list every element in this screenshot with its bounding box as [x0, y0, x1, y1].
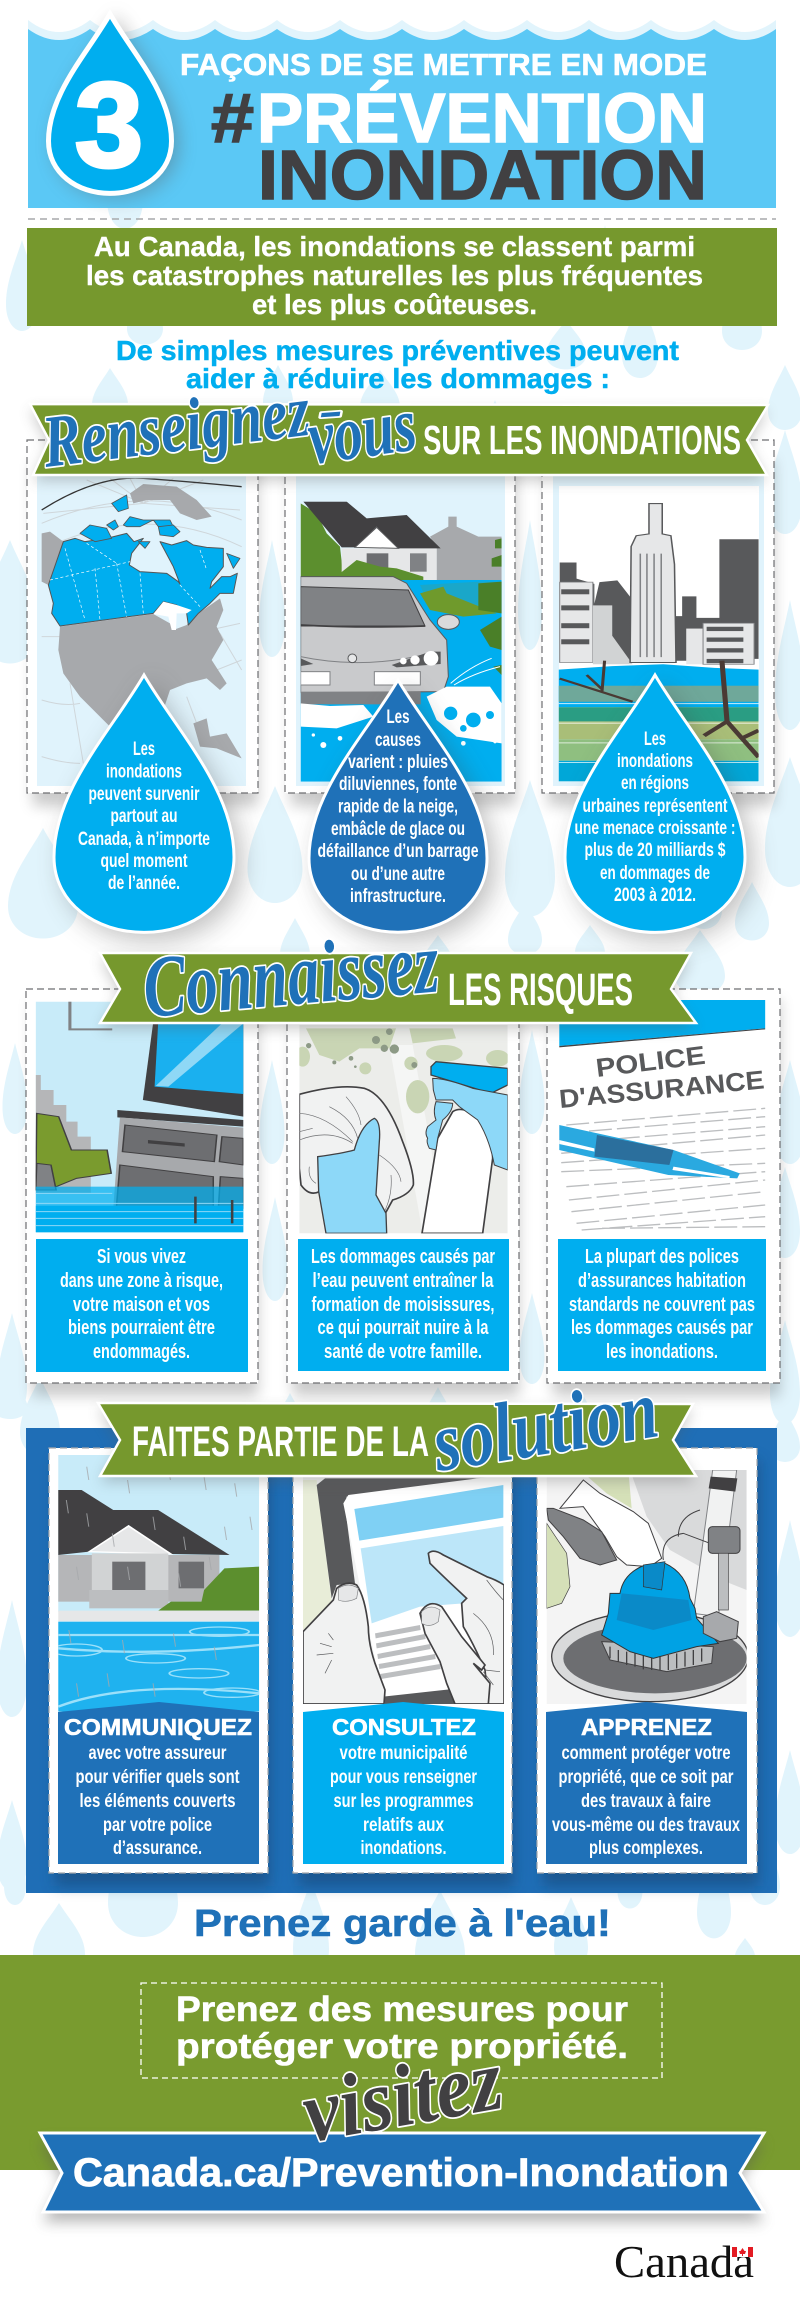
caption: moisissures: formation de moisissures,: [312, 1294, 494, 1316]
banner: connaissez les risques: Connaissez: [139, 914, 443, 1037]
caption: apprenez: plus complexes.: [589, 1838, 703, 1859]
caption: consultez: relatifs aux: [363, 1815, 444, 1836]
intro panel: [27, 228, 777, 326]
intro panel: Au Canada, les inondations se classent parmi: [94, 231, 695, 262]
drop with number 3: [48, 14, 180, 198]
dashed call-to-action box: Prenez des mesures pour: [176, 1990, 628, 2029]
header subtitle: FAÇONS DE SE METTRE EN MODE: [180, 47, 707, 82]
caption: apprenez: [546, 1702, 747, 1864]
banner: renseignez-vous: Renseignez: [37, 370, 314, 484]
caption: polices d'assurance: La plupart des polices: [585, 1246, 739, 1268]
banner: renseignez-vous: [30, 370, 768, 484]
drop: urban regions: inondations: [617, 751, 693, 772]
url ribbon: [40, 2133, 764, 2222]
drop: urban regions: en régions: [621, 773, 689, 794]
illustration: map of Canada: [42, 478, 242, 763]
drop: partout au Canada: de l’année.: [108, 873, 180, 894]
text: police d'assurance: POLICE: [594, 1040, 707, 1083]
caption: communiquez: d’assurance.: [113, 1838, 202, 1859]
caption: consultez: pour vous renseigner: [330, 1767, 477, 1788]
caption: communiquez: avec votre assureur: [88, 1743, 227, 1764]
illustration: hands on tablet: [303, 1470, 504, 1704]
headline inondation: INONDATION: [258, 136, 707, 214]
icon: Canadian flag: [732, 2247, 753, 2257]
dashed divider: [28, 218, 776, 220]
caption: communiquez: par votre police: [103, 1815, 212, 1836]
caption: communiquez: pour vérifier quels sont: [76, 1767, 240, 1788]
caption: zone à risque: Si vous vivez: [97, 1246, 186, 1268]
drop: causes: [309, 680, 495, 940]
subheading: [116, 335, 679, 394]
caption: zone à risque: dans une zone à risque,: [60, 1270, 223, 1292]
caption: apprenez: vous-même ou des travaux: [552, 1815, 740, 1836]
caption: apprenez: comment protéger votre: [562, 1743, 730, 1764]
drop: urban regions: plus de 20 milliards $: [584, 840, 726, 861]
caption: moisissures: santé de votre famille.: [324, 1341, 482, 1363]
drop: partout au Canada: quel moment: [100, 851, 188, 872]
section 2 cards: [0, 914, 800, 2287]
dashed call-to-action box: protéger votre propriété.: [176, 2027, 628, 2066]
illustration: cleaning mould: [295, 1025, 509, 1233]
drop: causes: infrastructure.: [350, 886, 446, 907]
illustration: house in the rain: [51, 1455, 260, 1712]
drop: causes: varient : pluies: [348, 752, 448, 773]
caption: consultez: CONSULTEZ: [332, 1714, 476, 1740]
caption: moisissures: l’eau peuvent entraîner la: [312, 1270, 494, 1292]
drop: causes: rapide de la neige,: [338, 796, 458, 818]
banner: connaissez les risques: [100, 914, 696, 1037]
caption: moisissures: [298, 1239, 509, 1371]
illustration: flooded basement: [36, 1002, 243, 1232]
caption: communiquez: les éléments couverts: [80, 1791, 236, 1812]
caption: apprenez: des travaux à faire: [581, 1791, 711, 1812]
call-to-action panel: [0, 1955, 800, 2170]
text: police d'assurance: [558, 1040, 766, 1114]
banner: renseignez-vous: -: [317, 380, 345, 438]
caption: apprenez: APPRENEZ: [581, 1714, 712, 1740]
drop: urban regions: en dommages de: [600, 863, 710, 884]
drop: partout au Canada: Les: [133, 739, 155, 760]
drop: urban regions: une menace croissante :: [574, 818, 736, 839]
subheading: aider à réduire les dommages :: [186, 363, 610, 394]
illustration: insurance policy: [559, 1000, 765, 1233]
caption: communiquez: [58, 1702, 259, 1864]
drop: partout au Canada: inondations: [106, 762, 182, 782]
hashtag mark: #: [211, 79, 254, 157]
caption: apprenez: propriété, que ce soit par: [558, 1767, 734, 1788]
illustration: flooded car and house: [301, 502, 502, 782]
banner: faites partie de la solution: [98, 1363, 696, 1490]
drop: urban regions: 2003 à 2012.: [614, 885, 696, 906]
section 3 blue panel: [26, 1428, 777, 1893]
drop: causes: causes: [375, 730, 421, 751]
caption: consultez: [303, 1702, 504, 1864]
subheading: De simples mesures préventives peuvent: [116, 335, 679, 366]
caption: polices d'assurance: [558, 1239, 766, 1371]
banner: renseignez-vous: vous: [302, 380, 421, 481]
drop with number 3: 3: [75, 58, 143, 192]
caption: communiquez: COMMUNIQUEZ: [64, 1714, 252, 1740]
illustration: flooded city skyline: [559, 504, 759, 782]
caption: consultez: inondations.: [360, 1838, 446, 1859]
drop: causes: défaillance d’un barrage: [318, 841, 478, 862]
illustration: sump pump: [547, 1470, 748, 1704]
intro panel: et les plus coûteuses.: [252, 289, 537, 320]
caption: zone à risque: biens pourraient être: [68, 1317, 215, 1339]
Canada wordmark: Canada: [614, 2236, 754, 2287]
intro panel: les catastrophes naturelles les plus fréquentes: [86, 260, 703, 291]
drop: causes: Les: [386, 707, 410, 728]
slogan: Prenez garde à l'eau!: [194, 1903, 611, 1945]
caption: zone à risque: votre maison et vos: [73, 1294, 210, 1316]
caption: zone à risque: [36, 1239, 248, 1372]
drop: causes: diluviennes, fonte: [339, 774, 457, 795]
banner: connaissez les risques: LES RISQUES: [448, 964, 633, 1015]
caption: moisissures: ce qui pourrait nuire à la: [318, 1317, 489, 1339]
drop: partout au Canada: [54, 675, 242, 940]
caption: consultez: votre municipalité: [340, 1743, 468, 1764]
url ribbon: Canada.ca/Prevention-Inondation: [73, 2151, 729, 2195]
text: police d'assurance: D'ASSURANCE: [558, 1064, 766, 1114]
caption: polices d'assurance: les inondations.: [606, 1341, 718, 1363]
banner: faites partie de la solution: solution: [426, 1363, 664, 1490]
caption: zone à risque: endommagés.: [93, 1341, 190, 1363]
drop: causes: embâcle de glace ou: [331, 819, 465, 840]
drop: partout au Canada: Canada, à n’importe: [78, 829, 210, 850]
header banner: [28, 20, 776, 214]
headline prevention: PRÉVENTION: [257, 79, 707, 157]
script word: visitez: visitez: [296, 2031, 509, 2162]
section 1 cards: [27, 440, 774, 806]
drop: urban regions: urbaines représentent: [582, 796, 728, 817]
caption: consultez: sur les programmes: [334, 1791, 474, 1812]
drop: partout au Canada: partout au: [110, 806, 178, 827]
drop: causes: ou d’une autre: [351, 864, 445, 885]
drop: urban regions: [565, 675, 753, 940]
banner: faites partie de la solution: FAITES PARTIE DE LA: [132, 1418, 429, 1466]
drop: urban regions: Les: [644, 729, 666, 750]
dashed call-to-action box: [141, 1983, 662, 2078]
drop: partout au Canada: peuvent survenir: [88, 784, 200, 805]
caption: moisissures: Les dommages causés par: [311, 1246, 495, 1268]
